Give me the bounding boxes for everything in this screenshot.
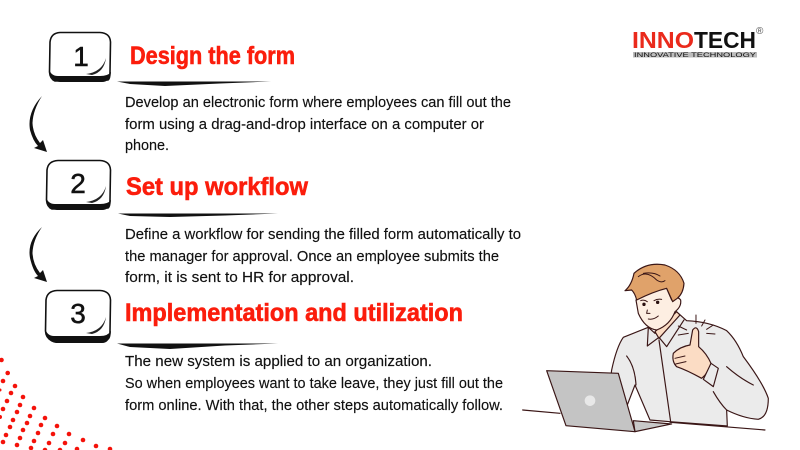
icon: underline stroke 2	[118, 214, 278, 217]
heading: design the form: Design the form	[130, 42, 295, 70]
cuff	[703, 363, 718, 387]
text block: step 1 description: phone.	[125, 137, 169, 154]
laptop	[633, 421, 672, 432]
hair	[625, 264, 684, 302]
text block: step 3 description: form online. With that, the other steps automatically follow.	[125, 397, 503, 414]
text block: step 1 description	[125, 94, 511, 154]
icon: number key 1	[49, 32, 111, 82]
text block: step 1 description: Develop an electronic form where employees can fill out the	[125, 94, 511, 111]
logo: innotech: TECH	[694, 27, 756, 53]
desk line	[523, 410, 765, 430]
text block: step 2 description: Define a workflow for sending the filled form automatically to	[125, 226, 521, 243]
text block: step 2 description: form, it is sent to HR for approval.	[125, 269, 354, 286]
text block: step 2 description	[125, 226, 521, 286]
text block: step 2 description: the manager for approval. Once an employee submits the	[125, 248, 499, 265]
icon: number key 3: 3	[70, 298, 86, 329]
icon: underline stroke 1	[117, 82, 271, 86]
icon: underline stroke 3	[117, 344, 278, 349]
icon: number key 2	[46, 160, 111, 210]
eyes and mouth	[641, 299, 662, 319]
hand thumbs up	[673, 328, 711, 378]
icon: number key 1: 1	[73, 41, 89, 72]
text block: step 3 description	[125, 353, 503, 414]
decorative red dot pattern	[0, 358, 112, 450]
sparkle lines	[678, 315, 715, 335]
logo: innotech: INNOVATIVE TECHNOLOGY	[634, 52, 757, 59]
text block: step 3 description: So when employees want to take leave, they just fill out the	[125, 375, 503, 392]
neck and face	[655, 312, 680, 338]
arrow: step 2 to step 3	[30, 227, 47, 282]
heading: implementation and utilization: Implementation and utilization	[125, 299, 463, 327]
text block: step 3 description: The new system is applied to an organization.	[125, 353, 432, 370]
text block: step 1 description: form using a drag-and-drop interface on a computer or	[125, 116, 484, 133]
illustration: man with laptop giving thumbs up	[523, 264, 768, 432]
logo: innotech	[632, 26, 764, 59]
arrow: step 1 to step 2	[30, 96, 47, 152]
icon: number key 2: 2	[70, 168, 86, 199]
logo: innotech: ®	[756, 26, 764, 37]
shirt	[610, 313, 768, 426]
icon: number key 3	[45, 290, 111, 343]
heading: set up workflow: Set up workflow	[126, 173, 309, 201]
logo: innotech: INNO	[632, 27, 694, 53]
